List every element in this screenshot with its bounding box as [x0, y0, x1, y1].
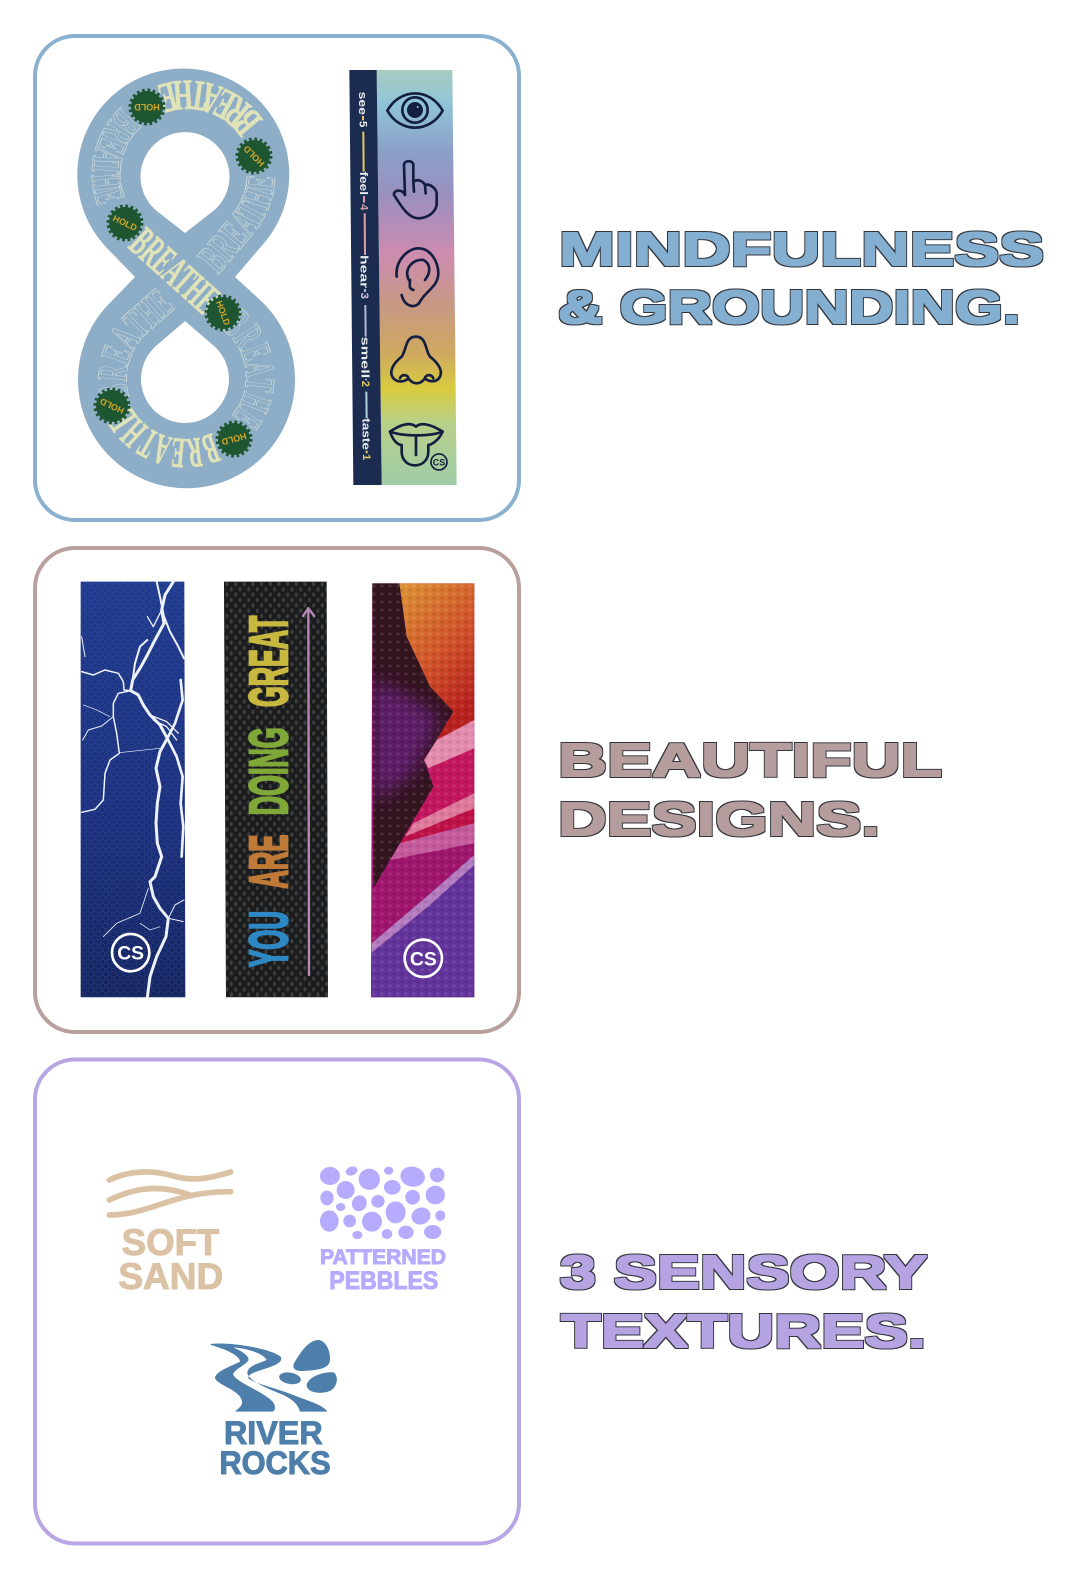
band: you are doing great	[224, 582, 328, 997]
panel: sensory textures	[35, 1060, 519, 1544]
icon: cs badge	[431, 454, 447, 470]
five senses icons	[387, 93, 447, 470]
cs logo: CS	[410, 949, 437, 970]
motivational text	[240, 616, 299, 967]
outline breathe lettering: BREATHE	[222, 308, 275, 431]
texture: patterned pebbles: PATTERNED	[320, 1244, 446, 1269]
motivational text: DOING	[240, 727, 299, 815]
icon: pointing hand	[394, 161, 437, 218]
band: lightning	[81, 582, 185, 997]
figure-eight breathing tool	[77, 68, 295, 488]
icon: eye	[387, 93, 443, 128]
cs logo	[112, 934, 149, 971]
hold stickers: HOLD	[241, 143, 267, 169]
five senses strip labels: hear	[358, 255, 370, 289]
texture logos	[109, 1165, 446, 1481]
texture: patterned pebbles: PEBBLES	[329, 1267, 438, 1295]
heading: beautiful designs	[558, 734, 942, 845]
outline breathe lettering	[91, 107, 276, 431]
texture: river rocks: RIVER	[224, 1415, 323, 1451]
five senses strip labels: 2	[359, 381, 371, 387]
five senses strip labels	[356, 92, 372, 460]
outline breathe lettering: BREATHE	[91, 107, 142, 206]
heading: sensory textures: TEXTURES.	[561, 1305, 926, 1357]
five senses strip labels: 3	[358, 293, 370, 299]
outline breathe lettering: BREATHE	[98, 288, 175, 397]
heading: sensory textures: 3 SENSORY	[560, 1246, 927, 1298]
five senses strip labels: 4	[357, 204, 369, 211]
panel: beautiful designs	[35, 548, 519, 1032]
hold stickers: HOLD	[134, 102, 160, 112]
hold stickers: HOLD	[111, 213, 139, 233]
icon: nose	[391, 337, 441, 383]
five senses strip labels: taste	[360, 418, 372, 450]
icon: ear	[397, 248, 438, 306]
hold stickers: HOLD	[220, 431, 248, 447]
five senses strip labels: 1	[360, 454, 372, 460]
heading: mindfulness and grounding: MINDFULNESS	[559, 223, 1044, 275]
texture: soft sand	[109, 1172, 231, 1297]
five senses strip labels: feel	[357, 172, 369, 195]
texture: patterned pebbles	[320, 1165, 446, 1295]
five senses strip	[349, 70, 457, 485]
icon: cs badge: CS	[433, 457, 445, 467]
arrow	[303, 608, 314, 975]
motivational text: GREAT	[240, 616, 299, 707]
icon: tongue	[390, 424, 443, 465]
panel: mindfulness and grounding	[33, 34, 521, 522]
five senses strip labels: see	[356, 92, 368, 115]
motivational text: YOU	[240, 911, 299, 967]
hold stickers: HOLD	[214, 299, 232, 327]
heading: mindfulness and grounding: & GROUNDING.	[558, 281, 1020, 333]
hold stickers	[96, 90, 270, 456]
heading: sensory textures	[560, 1246, 927, 1357]
heading: beautiful designs: DESIGNS.	[558, 793, 880, 845]
solid breathe lettering: BREATHE	[127, 226, 222, 316]
five senses strip labels: smell	[359, 337, 371, 378]
lightning bolts	[82, 582, 184, 997]
cs logo	[405, 940, 442, 977]
motivational text: ARE	[240, 835, 299, 889]
cs logo: CS	[117, 944, 144, 965]
texture: river rocks: ROCKS	[219, 1445, 331, 1481]
texture: soft sand: SOFT	[122, 1222, 219, 1263]
five senses strip labels: 5	[356, 121, 368, 127]
solid breathe lettering: BREATHE	[158, 80, 264, 138]
band: canyon	[371, 583, 474, 997]
bands	[81, 582, 474, 997]
heading: mindfulness and grounding	[558, 223, 1044, 333]
texture: river rocks	[211, 1340, 337, 1481]
hold stickers: HOLD	[98, 396, 126, 416]
heading: beautiful designs: BEAUTIFUL	[558, 734, 942, 786]
solid breathe lettering: BREATHE	[108, 408, 222, 468]
solid breathe lettering	[108, 80, 264, 468]
texture: soft sand: SAND	[118, 1256, 223, 1297]
outline breathe lettering: BREATHE	[196, 176, 276, 275]
